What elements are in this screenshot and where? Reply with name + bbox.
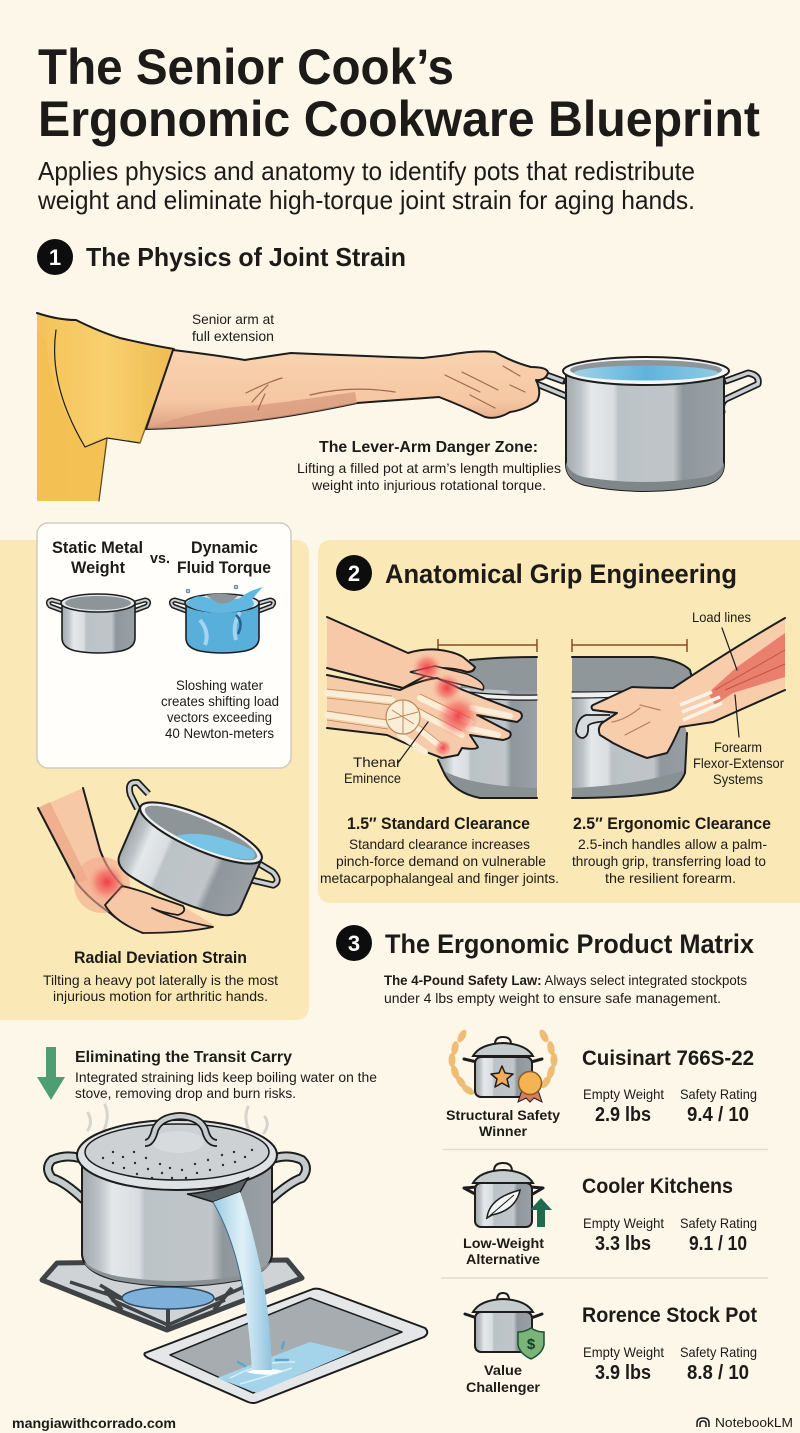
label: senior arm	[192, 311, 274, 344]
tendons	[680, 692, 722, 720]
footer: site url: mangiawithcorrado.com	[12, 1416, 176, 1431]
label: load lines: Load lines	[692, 609, 751, 625]
label: thenar eminence	[344, 754, 401, 786]
subtitle: weight and eliminate high-torque joint strain for aging hands.	[37, 185, 695, 215]
label: low-weight alternative: Low-Weight	[463, 1236, 545, 1251]
pour spout	[187, 1178, 248, 1202]
product name: Cuisinart 766S-22	[582, 1047, 754, 1070]
text: eliminating the transit carry: stove, removing drop and burn risks.	[75, 1085, 296, 1101]
text: eliminating the transit carry: Integrated straining lids keep boiling water on the	[75, 1069, 377, 1085]
text: standard clearance: pinch-force demand on vulnerable	[336, 853, 546, 869]
label: senior arm: full extension	[192, 328, 274, 344]
muscle	[708, 633, 785, 705]
text: sloshing water: 40 Newton-meters	[165, 725, 274, 741]
heading: dynamic fluid torque: Fluid Torque	[177, 558, 271, 577]
text: radial deviation strain	[43, 948, 278, 1004]
lid knob	[152, 1131, 204, 1153]
heading: section 1: 1	[49, 245, 61, 270]
safety rating stat: 9.4 / 10	[687, 1104, 749, 1126]
text: ergonomic clearance: through grip, transferring load to	[572, 853, 766, 869]
text: 4-pound safety law: The 4-Pound Safety Law: Always select integrated stockpots	[384, 972, 747, 988]
label: forearm flexor-extensor systems	[693, 739, 784, 787]
label: thenar eminence: Eminence	[344, 770, 401, 786]
forearm and fist	[146, 350, 548, 429]
panel: left yellow band	[0, 540, 309, 1020]
burner grate	[42, 1260, 302, 1330]
pot body	[82, 1160, 272, 1286]
dimension bar left	[438, 639, 537, 652]
pot tilted	[95, 780, 291, 934]
icon: pot with sloshing water	[171, 585, 274, 653]
label: thenar eminence: Thenar	[353, 754, 401, 770]
forearm and hand	[38, 788, 215, 933]
footer: notebooklm brand: NotebookLM	[715, 1415, 793, 1430]
upper forearm and thumb	[327, 617, 475, 688]
dimension bar right	[572, 639, 687, 652]
illustration: tilted pot radial deviation	[38, 780, 291, 934]
heading: static metal weight: Weight	[71, 558, 125, 577]
icon: value pot with dollar shield	[465, 1293, 544, 1359]
hand and forearm	[592, 618, 785, 758]
safety rating stat: Safety Rating	[680, 1086, 757, 1102]
empty weight stat: Empty Weight	[583, 1344, 664, 1360]
panel: static vs dynamic card	[37, 523, 291, 768]
text: eliminating the transit carry: Eliminating the Transit Carry	[75, 1049, 292, 1066]
thenar pointer	[398, 722, 428, 763]
bones	[327, 693, 510, 752]
empty weight stat	[583, 1215, 664, 1255]
red hot spot	[88, 863, 126, 901]
text: 4-pound safety law: under 4 lbs empty weight to ensure safe management.	[384, 990, 721, 1006]
heading: dynamic fluid torque	[177, 538, 271, 577]
label: forearm flexor-extensor systems: Systems	[713, 771, 763, 787]
text: lever-arm danger zone: weight into injurious rotational torque.	[311, 477, 546, 493]
text: sloshing water: vectors exceeding	[167, 709, 272, 725]
heading: section 1: The Physics of Joint Strain	[86, 242, 406, 272]
handle	[576, 715, 610, 738]
safety rating stat: 8.8 / 10	[687, 1362, 749, 1384]
heading: static metal weight	[52, 538, 143, 577]
empty weight stat: 3.9 lbs	[595, 1362, 651, 1384]
label: value challenger	[466, 1363, 541, 1395]
text: eliminating the transit carry	[75, 1049, 377, 1101]
product name: Rorence Stock Pot	[582, 1304, 757, 1327]
empty weight stat: Empty Weight	[583, 1215, 664, 1231]
icon: empty static pot	[48, 594, 149, 653]
vs label: vs.	[150, 550, 170, 567]
heading: section 2: 2	[348, 561, 360, 586]
label: value challenger: Value	[484, 1363, 523, 1378]
text: lever-arm danger zone: The Lever-Arm Danger Zone:	[319, 439, 538, 456]
heading: section 3: 3	[348, 931, 360, 956]
label: senior arm: Senior arm at	[192, 311, 274, 327]
heading: dynamic fluid torque: Dynamic	[191, 538, 258, 557]
panel: anatomical grip yellow band	[318, 540, 800, 903]
safety rating stat	[680, 1086, 757, 1126]
row: cooler kitchens	[463, 1163, 757, 1267]
empty weight stat	[583, 1344, 664, 1384]
heading: section 3: The Ergonomic Product Matrix	[385, 929, 754, 959]
subtitle: Applies physics and anatomy to identify pots that redistribute	[38, 156, 695, 186]
carpal bones	[386, 700, 420, 734]
straining dots	[102, 1149, 253, 1179]
safety rating stat: Safety Rating	[680, 1215, 757, 1231]
pot half right	[572, 657, 692, 798]
label: forearm flexor-extensor systems: Forearm	[714, 739, 762, 755]
text: lever-arm danger zone	[297, 439, 561, 493]
icon: value pot with dollar shield: $	[527, 1336, 536, 1353]
sink	[144, 1289, 427, 1403]
text: standard clearance: 1.5″ Standard Clearance	[347, 815, 530, 833]
pot with water	[532, 357, 758, 491]
text: radial deviation strain: Radial Deviation Strain	[74, 948, 247, 967]
sleeve	[37, 313, 174, 501]
label: low-weight alternative	[463, 1236, 545, 1267]
illustration: arm lifting pot	[37, 313, 758, 501]
label: forearm flexor-extensor systems: Flexor-Extensor	[693, 755, 784, 771]
empty weight stat	[583, 1086, 664, 1126]
safety rating stat	[680, 1215, 757, 1255]
empty weight stat: Empty Weight	[583, 1086, 664, 1102]
illustration: standard clearance hand	[327, 617, 537, 798]
text: standard clearance: metacarpophalangeal and finger joints.	[320, 870, 559, 886]
text: standard clearance	[320, 815, 559, 886]
subtitle	[37, 156, 695, 215]
text: sloshing water: creates shifting load	[161, 693, 279, 709]
joint inflammation	[412, 653, 480, 757]
pot half left	[438, 657, 537, 798]
text: sloshing water	[161, 677, 279, 741]
title	[38, 39, 760, 147]
label: value challenger: Challenger	[466, 1380, 541, 1395]
illustration: straining pot on stove and sink	[42, 1105, 427, 1403]
text: ergonomic clearance: 2.5-inch handles allow a palm-	[578, 836, 767, 852]
heading: static metal weight: Static Metal	[52, 538, 143, 557]
steam	[88, 1105, 267, 1133]
safety rating stat: Safety Rating	[680, 1344, 757, 1360]
safety rating stat: 9.1 / 10	[689, 1233, 747, 1255]
label: structural safety winner: Structural Safety	[446, 1108, 561, 1123]
rim and perforated lid	[77, 1120, 277, 1190]
text: 4-pound safety law	[384, 972, 747, 1006]
title: Ergonomic Cookware Blueprint	[38, 91, 760, 147]
icon: winner pot with laurels and medal	[448, 1028, 558, 1102]
fingers under pot	[105, 886, 213, 933]
empty weight stat: 3.3 lbs	[595, 1233, 651, 1255]
row: cuisinart	[446, 1028, 757, 1139]
safety rating stat	[680, 1344, 757, 1384]
text: sloshing water: Sloshing water	[176, 677, 263, 693]
pouring water	[213, 1192, 272, 1370]
text: lever-arm danger zone: Lifting a filled pot at arm’s length multiplies	[297, 460, 561, 476]
text: radial deviation strain: injurious motion for arthritic hands.	[53, 988, 268, 1004]
arrow: green down	[37, 1047, 65, 1100]
text: ergonomic clearance: the resilient forearm.	[605, 870, 736, 886]
strain glow	[74, 857, 130, 913]
illustration: ergonomic clearance hand	[572, 618, 785, 798]
x-ray hand	[327, 675, 522, 758]
text: standard clearance: Standard clearance increases	[349, 836, 530, 852]
icon: light pot with feather and arrow	[464, 1163, 552, 1227]
load line pointers	[722, 628, 739, 737]
text: ergonomic clearance: 2.5″ Ergonomic Clearance	[573, 815, 771, 833]
label: structural safety winner: Winner	[479, 1124, 528, 1139]
pot handles	[48, 1156, 306, 1200]
text: radial deviation strain: Tilting a heavy pot laterally is the most	[43, 972, 278, 988]
heading: section 2: Anatomical Grip Engineering	[385, 559, 737, 589]
title: The Senior Cook’s	[38, 39, 454, 95]
label: low-weight alternative: Alternative	[466, 1252, 541, 1267]
row: rorence	[465, 1293, 757, 1395]
product name: Cooler Kitchens	[582, 1175, 733, 1198]
text: ergonomic clearance	[572, 815, 771, 886]
empty weight stat: 2.9 lbs	[595, 1104, 651, 1126]
label: structural safety winner	[446, 1108, 561, 1139]
